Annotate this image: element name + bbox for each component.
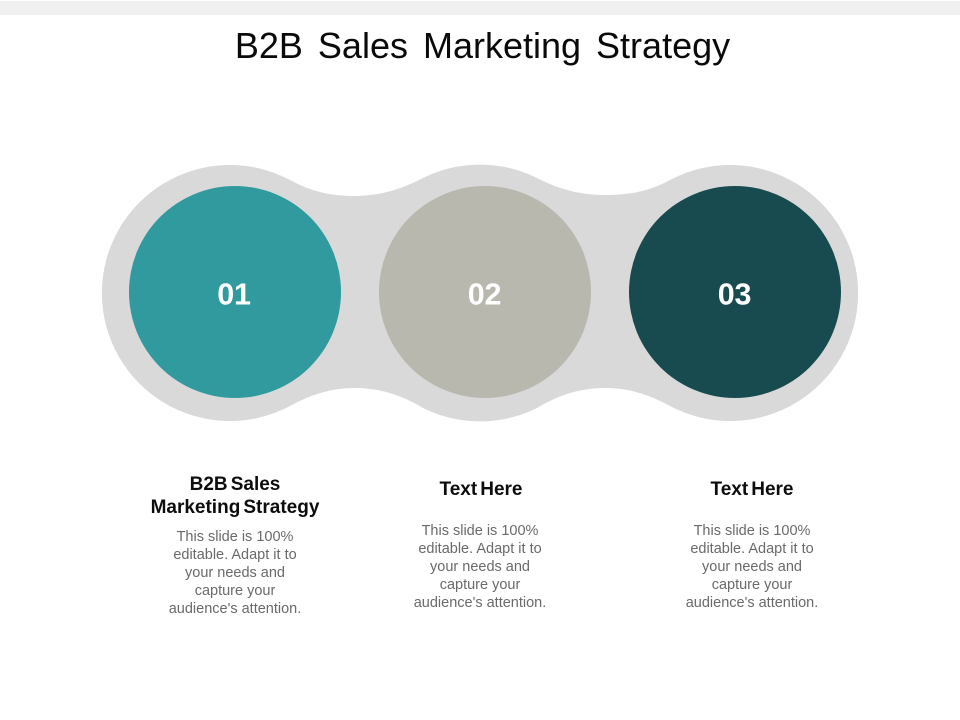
item 01 text: editable. Adapt it to [173, 547, 297, 563]
item 02 text: capture your [440, 577, 520, 593]
item 03 text: your needs and [702, 559, 802, 575]
item 02 circle [379, 186, 591, 398]
item 02 circle: 02 [468, 278, 501, 312]
item 03 text: This slide is 100% [694, 523, 811, 539]
item 01 text: Marketing Strategy [151, 497, 320, 518]
item 03 text: Text Here [710, 479, 794, 500]
item 01 text: B2B Sales [190, 474, 280, 495]
item 02 text: Text Here [440, 479, 522, 500]
item 01 text: audience's attention. [169, 601, 301, 617]
title: B2B Sales Marketing Strategy [235, 25, 730, 66]
item 03 text: capture your [712, 577, 792, 593]
item 01 circle [129, 186, 341, 398]
item 03 text: audience's attention. [686, 595, 818, 611]
item 03 text [686, 479, 818, 611]
item 02 text [414, 479, 546, 611]
item 03 circle: 03 [718, 278, 751, 312]
item 02 text: This slide is 100% [422, 523, 539, 539]
item 01 text: This slide is 100% [177, 529, 294, 545]
item 02 text: your needs and [430, 559, 530, 575]
item 03 text: editable. Adapt it to [690, 541, 814, 557]
background blob [102, 165, 858, 421]
item 02 text: editable. Adapt it to [418, 541, 542, 557]
top band [0, 1, 960, 15]
item 01 text: capture your [195, 583, 275, 599]
item 01 circle: 01 [217, 278, 251, 312]
item 01 text [151, 474, 320, 617]
item 02 text: audience's attention. [414, 595, 546, 611]
item 03 circle [629, 186, 841, 398]
item 01 text: your needs and [185, 565, 285, 581]
